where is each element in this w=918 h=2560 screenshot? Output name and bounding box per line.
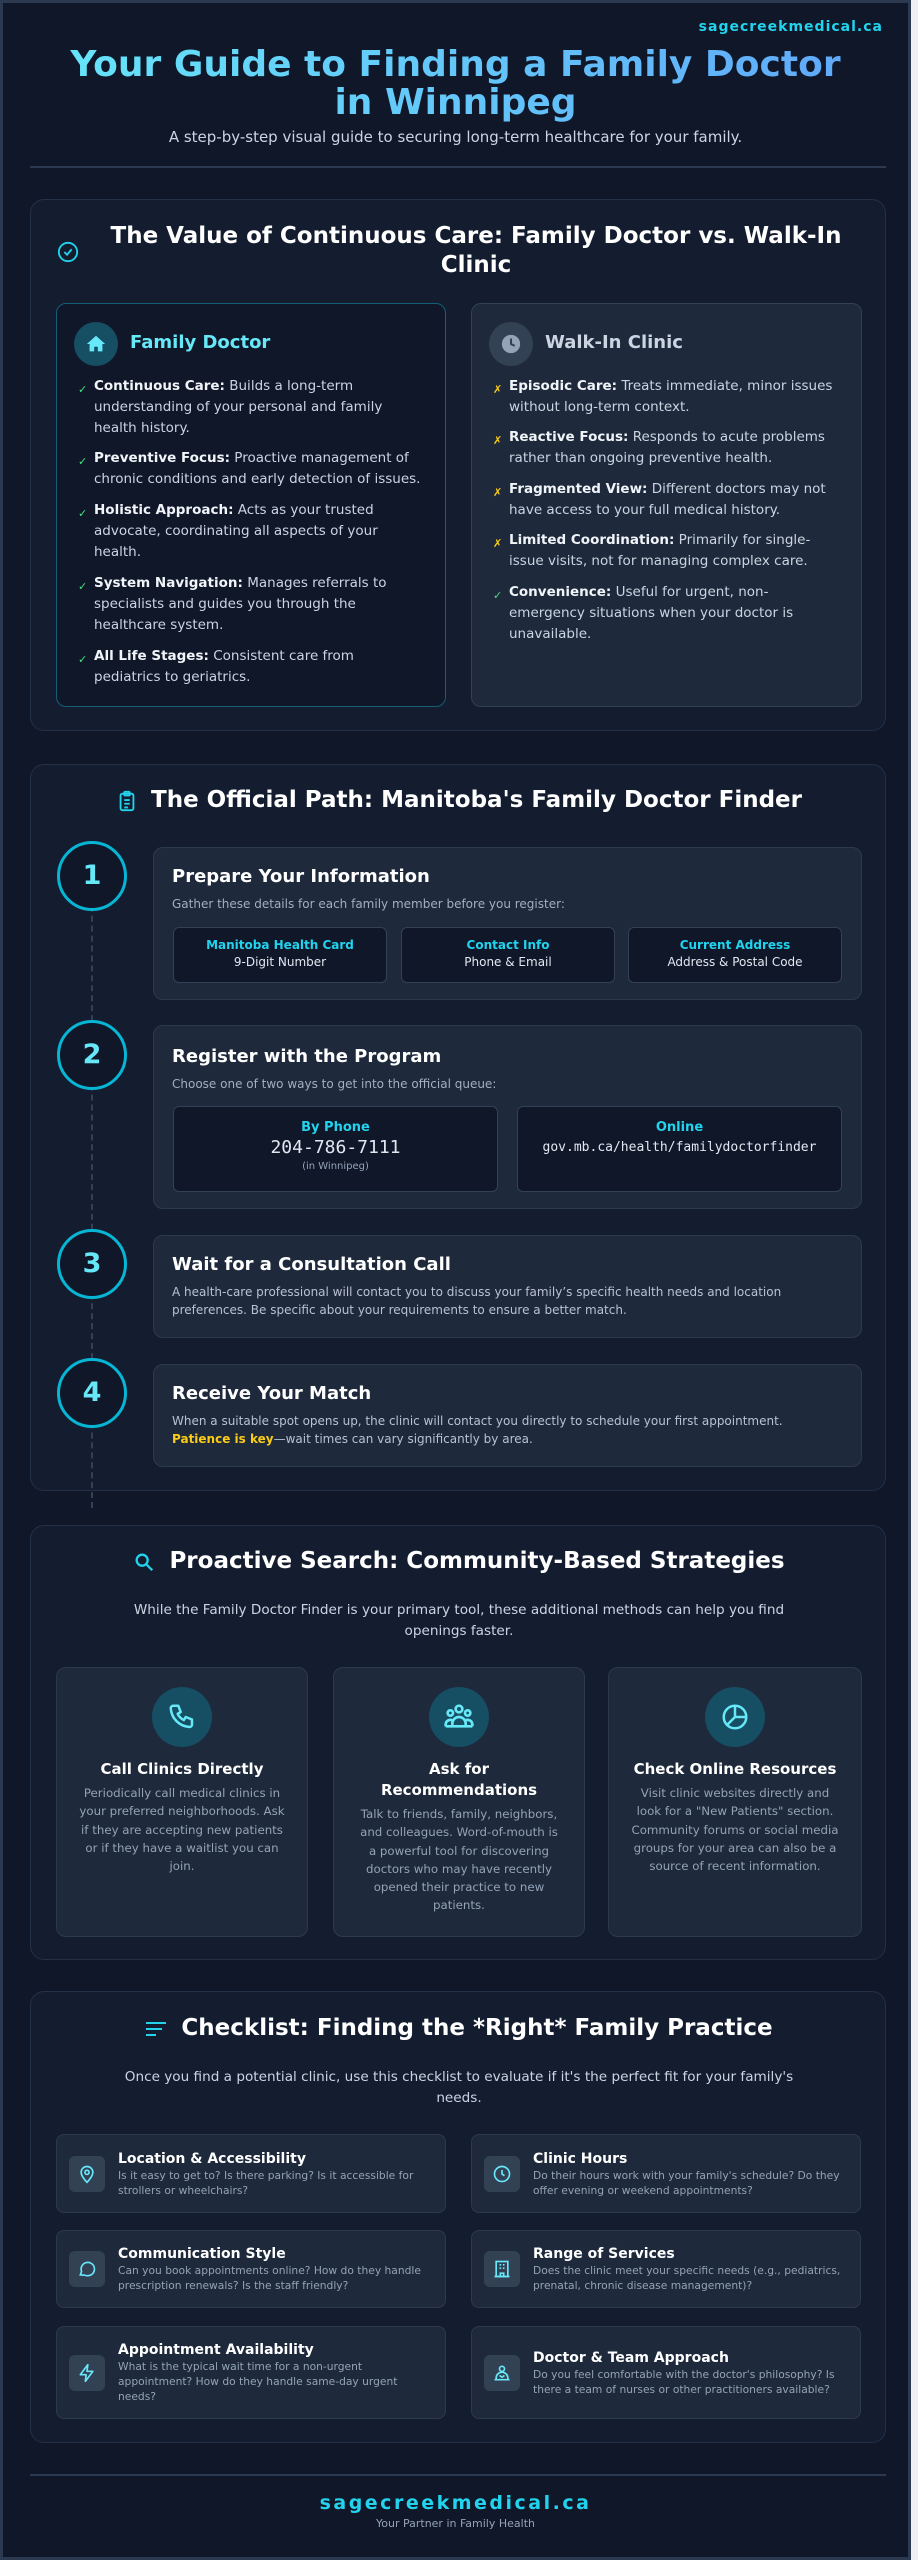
item: clinic hours: [471, 2134, 861, 2213]
title: [3, 46, 908, 122]
item: appointment availability: Appointment Availability: [118, 2342, 314, 2358]
option: online: gov.mb.ca/health/familydoctorfinder: [543, 1140, 816, 1155]
info box: address: [628, 927, 842, 983]
item: services: Does the clinic meet your specific needs (e.g., pediatrics, prenatal, chronic disease management)?: [533, 2264, 840, 2292]
option: phone: 204-786-7111: [270, 1137, 401, 1158]
timeline line: [91, 876, 93, 1508]
card: walk-in clinic: Limited Coordination: Primarily for single-issue visits, not for managing complex care.: [509, 532, 810, 569]
card: family doctor: Preventive Focus: Proactive management of chronic conditions and early detection of issues.: [94, 450, 420, 487]
icon: home: [74, 322, 118, 366]
card: family doctor: ✓: [78, 580, 87, 593]
icon: people: [429, 1687, 489, 1747]
card: online resources: Check Online Resources: [634, 1760, 836, 1778]
info box: contact: Phone & Email: [464, 955, 552, 969]
step 3 card: Wait for a Consultation Call: [172, 1254, 451, 1275]
card: walk-in clinic: ✗: [493, 383, 502, 396]
card: family doctor: ✓: [78, 507, 87, 520]
card: online resources: [608, 1667, 862, 1937]
header domain: sagecreekmedical.ca: [699, 19, 883, 35]
card: walk-in clinic: Episodic Care: Treats immediate, minor issues without long-term context.: [509, 378, 832, 415]
item: communication: Can you book appointments online? How do they handle prescription renewals? Is the staff friendly?: [118, 2264, 421, 2292]
icon: pie: [705, 1687, 765, 1747]
card: recommendations: Recommendations: [381, 1781, 537, 1799]
step 4 card: [153, 1364, 862, 1467]
step 2 card: Register with the Program: [172, 1046, 441, 1067]
heading: The Value of Continuous Care: Family Doctor vs. Walk-In Clinic: [111, 223, 841, 278]
card: walk-in clinic: [471, 303, 862, 707]
card: family doctor: System Navigation: Manages referrals to specialists and guides you through the healthcare system.: [94, 575, 387, 633]
option: phone: [173, 1106, 498, 1192]
step 1 circle: [57, 841, 127, 911]
item: location: Location & Accessibility: [118, 2150, 306, 2166]
step 1 card: [153, 847, 862, 1000]
step 3 card: A health-care professional will contact you to discuss your family’s specific health needs and location preferences. Be specific about your requirements to ensure a better match.: [172, 1285, 781, 1317]
card: family doctor: All Life Stages: Consistent care from pediatrics to geriatrics.: [94, 648, 354, 685]
step 4 card: Receive Your Match: [172, 1383, 371, 1404]
info box: health card: Manitoba Health Card: [206, 938, 354, 952]
card: walk-in clinic: ✓: [493, 589, 502, 602]
info box: contact: Contact Info: [467, 938, 549, 952]
icon: phone: [152, 1687, 212, 1747]
card: recommendations: Ask for: [429, 1760, 489, 1778]
card: walk-in clinic: Reactive Focus: Responds to acute problems rather than ongoing preventive health.: [509, 429, 825, 466]
step 1 card: Gather these details for each family member before you register:: [172, 897, 565, 911]
card: recommendations: [333, 1667, 585, 1937]
card: recommendations: Talk to friends, family, neighbors, and colleagues. Word-of-mouth is a powerful tool for discovering doctors who may have recently opened their practice to new patients.: [360, 1807, 558, 1912]
icon: lines: [146, 2022, 166, 2036]
info box: health card: 9-Digit Number: [234, 955, 326, 969]
card: walk-in clinic: Fragmented View: Different doctors may not have access to your full medical history.: [509, 481, 826, 518]
heading: The Official Path: Manitoba's Family Doctor Finder: [151, 787, 802, 813]
card: online resources: Visit clinic websites directly and look for a "New Patients" section. Community forums or social media groups for your area can also be a source of recent information.: [631, 1786, 839, 1873]
info box: contact: [401, 927, 615, 983]
icon: clipboard: [120, 790, 134, 812]
panel: official path: [30, 764, 886, 1491]
item: appointment availability: [56, 2326, 446, 2419]
title: Your Guide to Finding a Family Doctor: [70, 44, 841, 85]
step 4 card: When a suitable spot opens up, the clinic will contact you directly to schedule your first appointment. Patience is key—wait times can vary significantly by area.: [172, 1414, 783, 1446]
footer: Your Partner in Family Health: [376, 2517, 535, 2530]
card: walk-in clinic: ✗: [493, 434, 502, 447]
step 1 card: Prepare Your Information: [172, 866, 430, 887]
option: phone: By Phone: [301, 1120, 370, 1135]
panel: continuous care: [30, 199, 886, 731]
item: location: Is it easy to get to? Is there parking? Is it accessible for strollers or wheelchairs?: [118, 2168, 413, 2196]
icon: search: [136, 1554, 153, 1571]
item: communication: [56, 2230, 446, 2308]
item: appointment availability: What is the typical wait time for a non-urgent appointment? How do they handle same-day urgent needs?: [118, 2360, 397, 2403]
title: in Winnipeg: [334, 82, 577, 123]
step 4 circle: 4: [83, 1377, 101, 1408]
item: clinic hours: Do their hours work with your family's schedule? Do they offer evening or weekend appointments?: [533, 2168, 840, 2196]
option: phone: (in Winnipeg): [302, 1161, 369, 1172]
panel: checklist: [30, 1991, 886, 2443]
footer: [320, 2492, 591, 2530]
card: walk-in clinic: Convenience: Useful for urgent, non-emergency situations when your doctor is unavailable.: [509, 584, 793, 642]
step 2 card: Choose one of two ways to get into the official queue:: [172, 1077, 496, 1091]
info box: health card: [173, 927, 387, 983]
item: location: [56, 2134, 446, 2213]
intro text: While the Family Doctor Finder is your primary tool, these additional methods can help you find openings faster.: [134, 1602, 784, 1639]
item: doctor & team: [471, 2326, 861, 2419]
option: online: [517, 1106, 842, 1192]
info box: address: Address & Postal Code: [667, 955, 803, 969]
step 2 card: [153, 1025, 862, 1209]
step 3 circle: [57, 1229, 127, 1299]
card: family doctor: Holistic Approach: Acts as your trusted advocate, coordinating all aspects of your health.: [94, 502, 378, 560]
subtitle: A step-by-step visual guide to securing long-term healthcare for your family.: [169, 128, 742, 146]
item: doctor & team: Do you feel comfortable with the doctor's philosophy? Is there a team of nurses or other practitioners available?: [533, 2368, 835, 2396]
intro text: Once you find a potential clinic, use this checklist to evaluate if it's the perfect fit for your family's needs.: [125, 2069, 793, 2106]
item: services: Range of Services: [533, 2246, 675, 2262]
card title: Family Doctor: [130, 332, 270, 353]
option: online: Online: [656, 1120, 703, 1135]
card: call clinics: [56, 1667, 308, 1937]
item: doctor & team: Doctor & Team Approach: [533, 2350, 729, 2366]
card: family doctor: ✓: [78, 653, 87, 666]
card title: Walk-In Clinic: [545, 332, 683, 353]
icon: check circle: [58, 242, 78, 262]
info box: address: Current Address: [680, 938, 790, 952]
step 2 circle: 2: [83, 1039, 101, 1070]
panel: proactive search: [30, 1525, 886, 1960]
icon: clock: [489, 322, 533, 366]
step 3 circle: 3: [83, 1248, 101, 1279]
card: family doctor: [56, 303, 446, 707]
card: call clinics: Periodically call medical clinics in your preferred neighborhoods. Ask if they are accepting new patients or if they have a waitlist you can join.: [79, 1786, 285, 1873]
footer: sagecreekmedical.ca: [320, 2492, 591, 2514]
item: communication: Communication Style: [118, 2246, 286, 2262]
card: family doctor: ✓: [78, 383, 87, 396]
step 4 circle: [57, 1358, 127, 1428]
card: walk-in clinic: ✗: [493, 486, 502, 499]
step 3 card: [153, 1235, 862, 1338]
step 2 circle: [57, 1020, 127, 1090]
heading: Proactive Search: Community-Based Strategies: [169, 1548, 785, 1574]
heading: Checklist: Finding the *Right* Family Practice: [181, 2015, 773, 2041]
item: services: [471, 2230, 861, 2308]
step 1 circle: 1: [83, 860, 101, 891]
item: clinic hours: Clinic Hours: [533, 2150, 627, 2166]
card: family doctor: ✓: [78, 455, 87, 468]
card: family doctor: Continuous Care: Builds a long-term understanding of your personal and family health history.: [94, 378, 382, 436]
card: walk-in clinic: ✗: [493, 537, 502, 550]
card: call clinics: Call Clinics Directly: [101, 1760, 263, 1778]
